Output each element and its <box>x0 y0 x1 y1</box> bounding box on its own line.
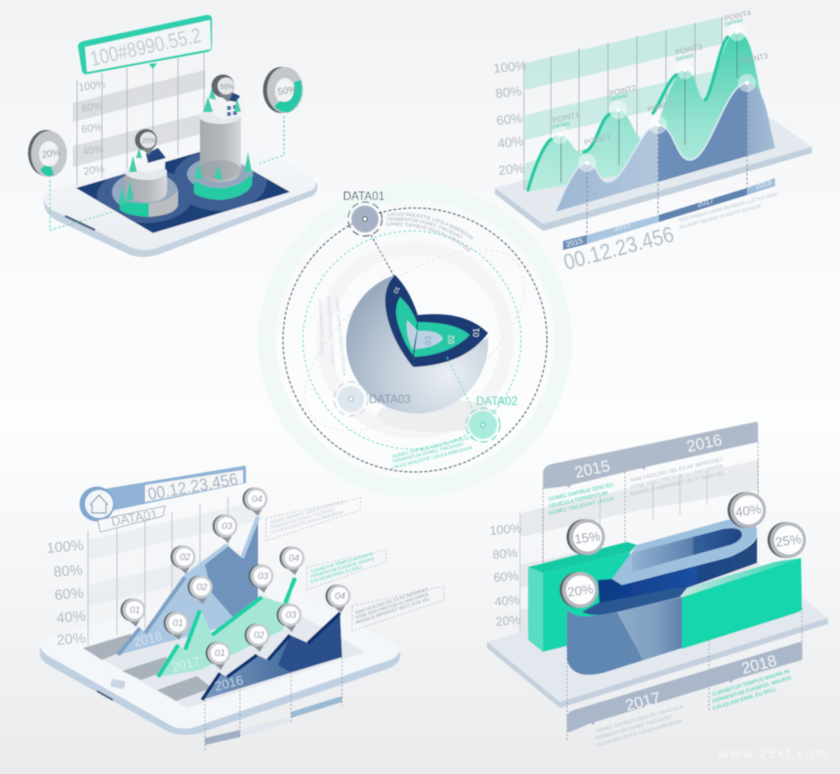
DATA02 node: DATA02 <box>476 396 518 408</box>
axis labels: 40% <box>494 593 520 609</box>
bottom banner: 2017 <box>624 690 663 715</box>
caption 2017: FERMENTUM DONEC TINCIDUNT <box>595 714 673 742</box>
right pin: 50% <box>220 84 234 91</box>
right donut: 50% <box>277 84 298 98</box>
axis labels: 40% <box>82 143 104 158</box>
top banner: 2016 <box>685 432 724 456</box>
axis labels: 80% <box>81 100 103 115</box>
timeline bar <box>563 178 775 250</box>
pins 2018: 02 <box>180 552 191 563</box>
blue ridge line <box>555 83 747 212</box>
pins 2016: 02 <box>254 630 265 641</box>
axis labels: 20% <box>83 163 105 178</box>
grid lines <box>524 17 722 190</box>
panel: phone with cylinders <box>28 15 317 257</box>
value label box: 100#8990.55.2 <box>88 24 203 71</box>
note 1: LACUS MOLESTIE LIGULA BIBENDUM <box>270 509 344 535</box>
note 1: FERMENTUM DONEC TINCIDUNT <box>270 507 336 530</box>
caption 2016: MAGNA IS IMPERDIET VELIT, DUIS VEL <box>630 470 726 498</box>
timeline bar: 2018 <box>754 178 773 191</box>
grid and bands <box>88 497 262 645</box>
pins 2018 <box>120 488 268 627</box>
axis labels: 80% <box>492 546 518 562</box>
note 2: A ALIQUAM ENIM, EU SOLL <box>310 564 364 584</box>
left pin <box>135 129 157 155</box>
timeline bar: 2015 <box>613 220 632 233</box>
axis labels: 40% <box>497 133 525 151</box>
drop lines <box>543 442 802 740</box>
tablet home button <box>97 679 126 700</box>
bottom banner <box>567 642 802 732</box>
caption 2017: DONEC DAPIBUS ODIO EU VEHICULA <box>595 704 684 735</box>
header bar: 00.12.23.456 <box>146 469 239 504</box>
axis labels: 80% <box>53 563 83 581</box>
pins 2017: 01 <box>173 618 183 629</box>
point labels: POINT4 <box>723 8 752 23</box>
top banner: 2015 <box>573 458 612 482</box>
2016 series: 2016 <box>213 672 245 694</box>
axis labels: 60% <box>81 121 103 136</box>
axis labels <box>493 58 528 178</box>
upper ribbon <box>612 518 757 585</box>
left teal block <box>528 542 637 652</box>
axis labels: 40% <box>56 609 86 627</box>
halo rings <box>267 192 563 488</box>
pins 2016: 04 <box>335 591 345 602</box>
orbit lines <box>275 208 555 472</box>
2017 series: 2017 <box>170 653 202 675</box>
note 2: CURABITUR TEMPUS MAGNA IN <box>310 551 373 574</box>
caption 2015: DONEC DAPIBUS ODIO EU <box>548 482 614 503</box>
point labels: POINT3 <box>740 51 769 66</box>
pins 2018: 03 <box>222 521 233 532</box>
DATA03 caption: LACUS MOLESTIE LIGULA <box>318 300 325 355</box>
panel: area chart <box>493 8 812 275</box>
watermark: www.25xt.com <box>717 745 828 761</box>
caption 2018: FERMENTUM EUISMOD, MAURIS <box>712 675 792 705</box>
left donut <box>28 130 67 177</box>
axis labels: 100% <box>493 58 528 76</box>
navy wall <box>598 535 757 612</box>
DATA01 caption: FERMENTUM DONEC TINCIDUNT <box>386 217 464 240</box>
platform <box>495 113 812 231</box>
DATA03 caption: DONEC DAPIBUS ODIO EU VEHICULA <box>334 297 347 376</box>
tablet body <box>40 578 400 735</box>
2016 series <box>202 613 342 700</box>
blue area series <box>555 83 775 212</box>
axis labels <box>78 78 106 178</box>
percentage badges: 20% <box>566 581 595 600</box>
front wall <box>567 597 682 675</box>
DATA01 node <box>343 191 394 276</box>
point labels: POINT1 <box>583 132 612 147</box>
caption 2017: LACUS MOLESTIE LIGULA BIBENDUM <box>595 718 683 749</box>
DATA02 node <box>447 357 518 442</box>
axis labels <box>46 538 86 649</box>
percentage badges <box>560 492 806 608</box>
axis labels: 60% <box>493 569 519 585</box>
DATA03 node <box>334 382 411 416</box>
right donut <box>263 67 303 113</box>
caption: SED FINIBUS LIGNA EUISMOD LUCTUS NON <box>678 192 778 224</box>
point labels: POINT2 <box>646 99 675 114</box>
pins 2017: 04 <box>289 553 299 564</box>
percentage badges: 40% <box>734 501 763 520</box>
DATA02 caption: LACUS MOLESTIE LIGULA BIBENDUM <box>391 445 473 470</box>
axis labels: 60% <box>496 110 524 128</box>
caption 2016: VITAE ODIO PRETIUM ULLAMCORPER <box>630 464 724 491</box>
axis labels: 20% <box>495 613 521 629</box>
caption 2018: A ALIQUAM ENIM, EU SOLL <box>712 687 778 712</box>
point labels: POINT1 <box>551 110 580 125</box>
grid lines and bands <box>73 52 205 186</box>
axis labels: 100% <box>78 78 106 94</box>
panel: sphere diagram <box>258 190 572 496</box>
platform <box>487 560 828 708</box>
2018 series: 2018 <box>132 628 164 650</box>
tablet screen <box>83 594 365 708</box>
teal bands <box>525 17 722 190</box>
note 1: DONEC DAPIBUS ODIO EU VEHICULA <box>270 499 344 525</box>
right pin <box>212 74 234 102</box>
DATA02 caption <box>391 434 475 470</box>
right teal block <box>682 558 802 649</box>
2017 series <box>158 578 295 677</box>
caption 2015: DONEC TINCIDUNT LACUS <box>548 496 615 517</box>
DATA01 caption: LACUS MOLESTIE LIGULA BIBENDUM <box>388 212 474 240</box>
DATA01 caption: DONEC DAPIBUS ODIO EU VEHICULA <box>386 222 470 252</box>
note 3: MAGNA IS IMPERDIET VELIT, DUIS VEL <box>355 596 431 625</box>
timeline bar: 2017 <box>696 196 715 209</box>
left house <box>129 148 166 172</box>
header bar <box>98 466 246 511</box>
right house <box>203 88 244 119</box>
cut section <box>385 275 488 367</box>
cut section: 01 <box>472 328 481 337</box>
DATA01 tab <box>98 506 165 532</box>
panel: ribbon chart <box>487 422 828 749</box>
caption: FEUGIAT MAURIS DUSDPIT SUSQUE <box>679 203 762 231</box>
pins 2016: 03 <box>286 610 297 621</box>
pins 2017 <box>164 546 304 640</box>
sphere <box>346 275 488 413</box>
sphere shadow <box>377 398 493 432</box>
pins 2016: 01 <box>215 648 225 659</box>
pins 2017: 02 <box>197 582 208 593</box>
note 2: FERMENTUM EUISMOD, MAURIS <box>310 556 375 579</box>
timeline bar: 2015 <box>565 236 584 249</box>
point labels: DATA03 <box>675 53 694 63</box>
pins 2018: 01 <box>130 605 140 616</box>
note 3 <box>352 586 444 631</box>
left donut: 20% <box>41 147 62 161</box>
top banner <box>543 422 758 489</box>
2018 series <box>118 517 258 655</box>
home badge <box>80 486 114 522</box>
cut section: 01 <box>393 286 402 295</box>
bottom banner: 2018 <box>740 653 779 678</box>
DATA01 node: DATA01 <box>343 191 385 203</box>
front top fold <box>582 588 687 615</box>
left cylinder <box>112 164 178 217</box>
phone screen <box>76 148 290 233</box>
cut section: 02 <box>447 335 456 344</box>
panel: tablet with mountains <box>40 466 444 750</box>
percentage badges: 15% <box>573 528 602 547</box>
bands and grid <box>520 458 758 632</box>
peak markers <box>551 23 756 172</box>
caption 2015: VEHICULA FERMENTUM <box>548 491 608 510</box>
drop lines <box>561 33 747 235</box>
teal highlights <box>528 37 728 190</box>
teal area series <box>527 32 775 192</box>
axis labels: 100% <box>489 521 522 538</box>
DATA02 caption: FERMENTUM DONEC TINCIDUNT <box>392 441 464 464</box>
right cylinder <box>187 108 253 200</box>
pins 2017: 03 <box>258 571 269 582</box>
pins 2016 <box>206 584 350 670</box>
phone body <box>44 135 317 257</box>
axis labels: 20% <box>56 631 86 649</box>
DATA03 node: DATA03 <box>369 394 411 406</box>
axis labels: 20% <box>498 160 526 178</box>
axis labels: 60% <box>54 586 84 604</box>
axis labels: 100% <box>46 538 84 557</box>
DATA03 caption: FERMENTUM DONEC TINCIDUNT <box>326 297 336 367</box>
caption 2018: CURABITUR TEMPUS MAGNA IN <box>712 669 790 698</box>
DATA03 caption <box>318 297 347 376</box>
caption 2018 <box>712 669 792 712</box>
point labels: DATA02 <box>609 93 628 103</box>
axis labels <box>489 521 522 629</box>
cut section: 03 <box>424 336 433 345</box>
note 3: NAM FACILISIS VEL EX AC IMPERDIET <box>355 586 429 615</box>
big number: 00.12.23.456 <box>561 221 676 275</box>
note 3: VITAE ODIO PRETIUM ULLAMCORPER <box>355 591 429 620</box>
DATA01 tab: DATA01 <box>110 507 159 529</box>
dashed connectors <box>50 116 284 230</box>
point labels: POINT3 <box>674 42 703 57</box>
note 1 <box>266 498 361 541</box>
left pin: 20% <box>142 138 156 145</box>
note 2 <box>307 550 386 590</box>
caption 2016 <box>630 457 726 498</box>
point labels: DATA04 <box>724 18 743 28</box>
point labels: POINT2 <box>608 83 637 98</box>
pins 2018: 04 <box>252 494 262 505</box>
axis labels: 80% <box>495 83 523 101</box>
screen glows <box>97 149 267 223</box>
bottom bars <box>205 657 342 750</box>
caption 2016: NAM FACILISIS VEL EX AC IMPERDIET <box>630 457 724 484</box>
percentage badges: 25% <box>774 531 803 550</box>
caption 2017 <box>595 704 684 749</box>
point labels <box>551 8 769 147</box>
point labels: DATA01 <box>552 121 571 131</box>
caption 2015 <box>548 482 615 517</box>
DATA02 caption: DONEC DAPIBUS ODIO EU VEHICULA <box>392 434 475 459</box>
